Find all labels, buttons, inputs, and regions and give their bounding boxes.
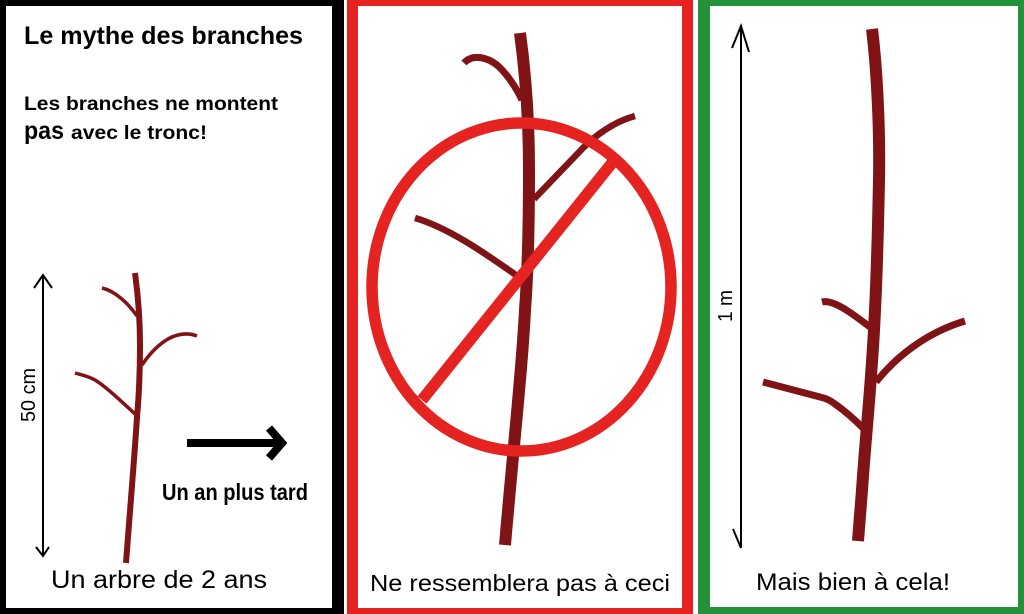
- arrow: next year: [187, 428, 282, 458]
- prohibition sign: [372, 123, 671, 451]
- caption: middle: Ne ressemblera pas à ceci: [370, 570, 670, 596]
- label: un an plus tard: Un an plus tard: [162, 479, 308, 505]
- measure arrow: 1 m: [732, 25, 749, 548]
- panel: red frame: [347, 0, 693, 614]
- caption: left: Un arbre de 2 ans: [51, 566, 267, 594]
- subtitle: [24, 93, 279, 145]
- tree: two-year-old: [75, 273, 197, 563]
- tree: wrong: [415, 33, 635, 545]
- caption: right: Mais bien à cela!: [756, 569, 950, 596]
- subtitle: Les branches ne montent: [24, 93, 279, 115]
- label: 1 m: 1 m: [715, 290, 737, 322]
- measure arrow: 50 cm: [34, 275, 52, 556]
- panel: left black frame: [0, 0, 344, 614]
- title: Le mythe des branches: [24, 22, 303, 50]
- panel: green frame: [698, 0, 1024, 614]
- tree: correct: [763, 29, 965, 541]
- label: 50 cm: 50 cm: [18, 368, 40, 422]
- subtitle: pas: [24, 117, 64, 145]
- subtitle: avec le tronc!: [71, 122, 207, 144]
